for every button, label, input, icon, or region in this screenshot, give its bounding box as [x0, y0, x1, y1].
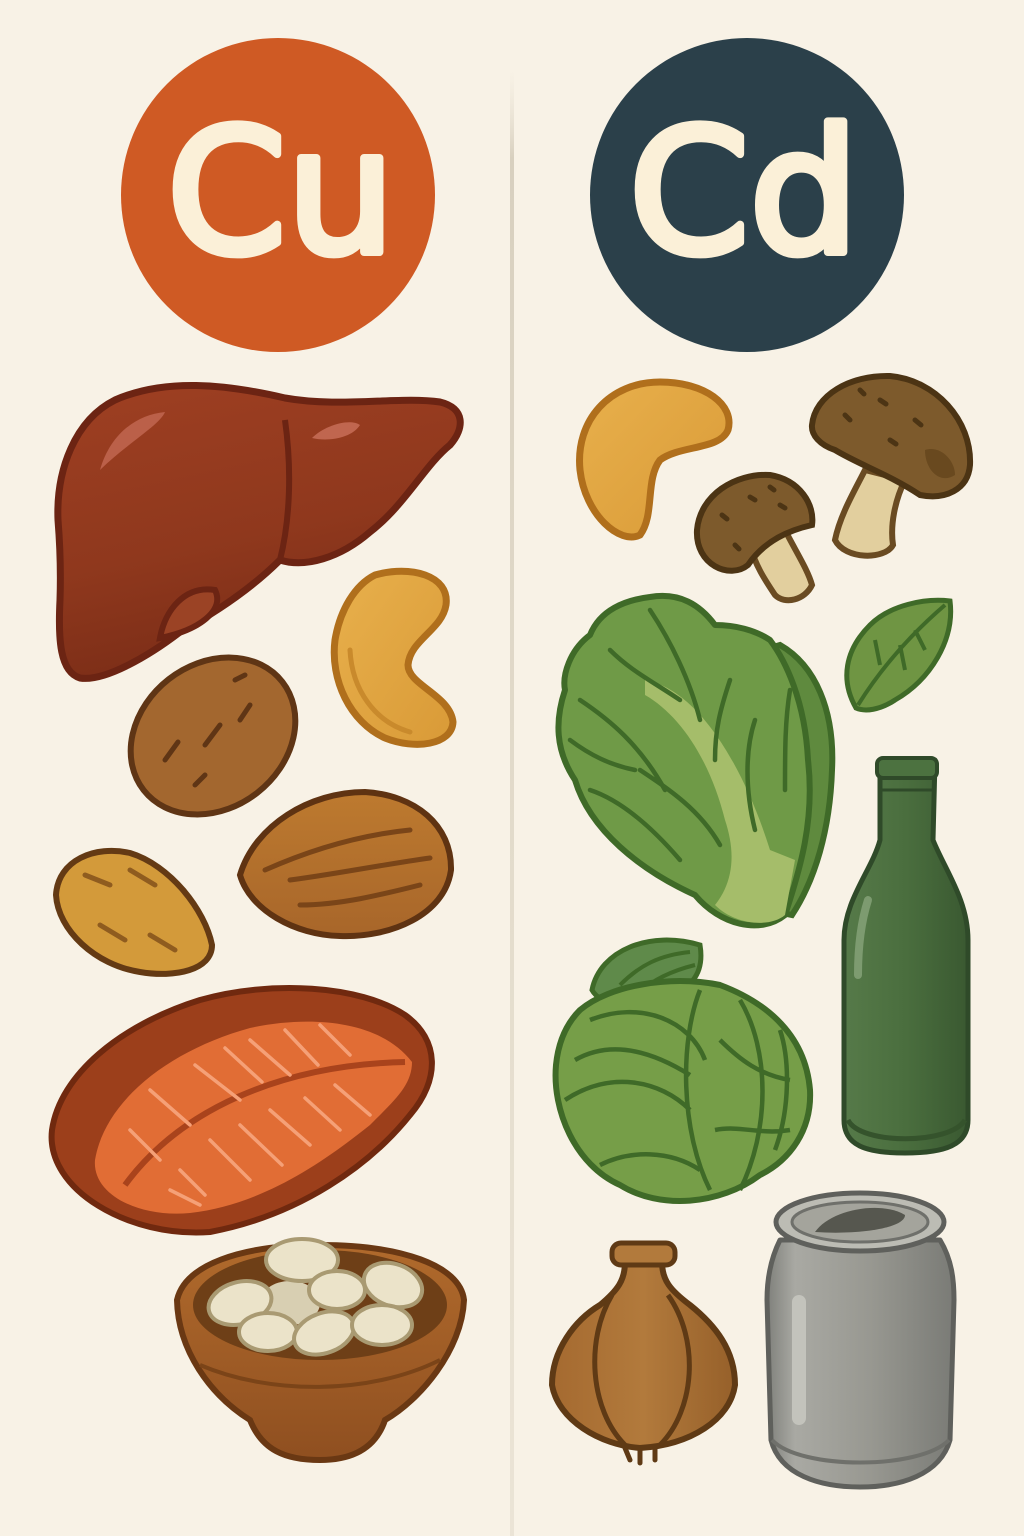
icon: garlic bulb	[552, 1243, 735, 1463]
icon: green bottle	[844, 758, 968, 1153]
icon: cashew	[334, 571, 453, 744]
icon: cabbage	[556, 940, 810, 1201]
icon: salmon fillet	[52, 988, 432, 1233]
icon: small mushroom	[697, 475, 812, 600]
icon: bowl of white beans	[177, 1239, 464, 1460]
icon: golden nut	[56, 851, 212, 974]
Cd element badge	[590, 38, 904, 352]
Cd element badge: Cd	[629, 92, 859, 293]
icon: lettuce	[558, 596, 832, 925]
Cu element badge	[121, 38, 435, 352]
icon: cashew right	[580, 382, 729, 537]
icon: almond	[240, 792, 451, 936]
icon: large mushroom	[812, 376, 970, 556]
icon: spinach leaf	[847, 600, 951, 710]
icon: brown nut	[99, 625, 327, 847]
icon: aluminium can	[767, 1193, 954, 1487]
icon: liver	[58, 385, 460, 678]
Cu element badge: Cu	[167, 92, 395, 293]
